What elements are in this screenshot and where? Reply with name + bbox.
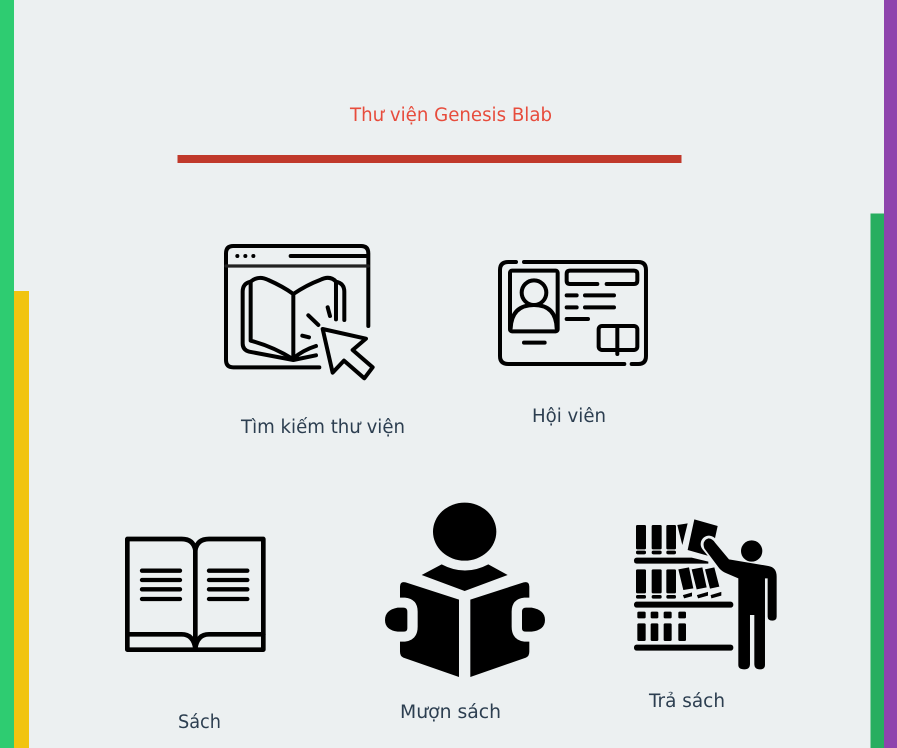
icon: member card [500, 262, 646, 364]
left yellow bar [14, 291, 29, 748]
icon: returning book to shelf [634, 519, 777, 669]
label: borrow books: Mượn sách [400, 702, 501, 723]
icon: library search window [226, 246, 373, 378]
title: Thư viện Genesis Blab [349, 105, 552, 126]
label: return books: Trả sách [648, 691, 725, 712]
left green bar [0, 0, 14, 748]
label: library search: Tìm kiếm thư viện [240, 417, 405, 438]
icon: person reading [385, 503, 545, 677]
icon: open book [127, 539, 263, 650]
title underline [178, 155, 682, 163]
right green bar [870, 214, 884, 748]
label: member: Hội viên [532, 406, 606, 427]
label: books: Sách [178, 712, 221, 733]
right purple bar [884, 0, 897, 748]
